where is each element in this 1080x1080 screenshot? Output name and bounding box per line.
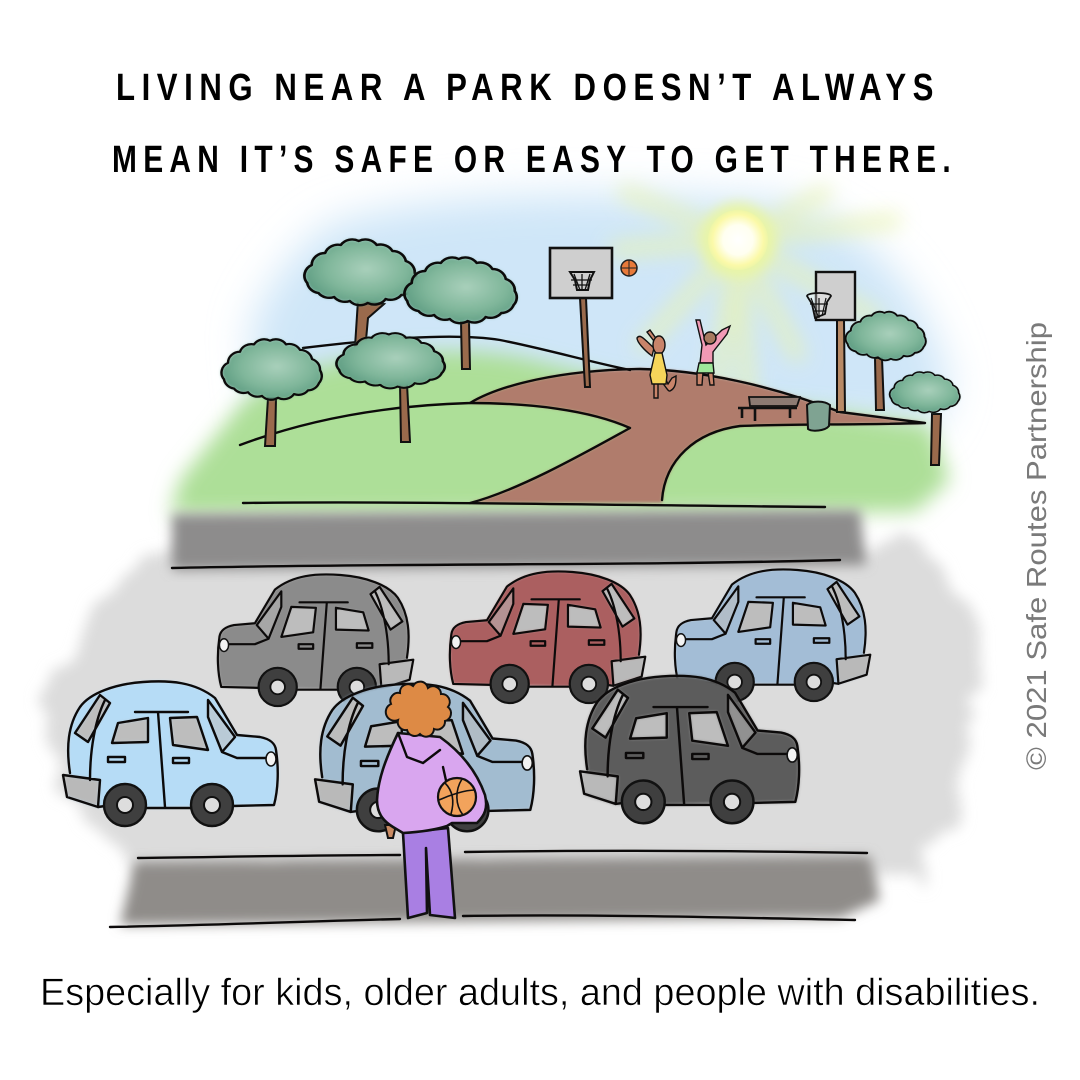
child with basketball — [377, 682, 486, 918]
tree 6 — [890, 372, 960, 465]
trees — [221, 239, 960, 465]
tree 1 — [304, 239, 417, 362]
dirt path — [470, 369, 925, 503]
car: red — [450, 571, 645, 703]
basketball — [438, 778, 476, 816]
basketball in air — [621, 260, 637, 276]
caption: Especially for kids, older adults, and people with disabilities. — [40, 972, 1040, 1014]
car: dark grey — [218, 574, 413, 706]
title — [112, 67, 957, 181]
player in pink — [696, 320, 730, 385]
tree 4 — [336, 333, 445, 442]
car: slate blue — [315, 684, 534, 831]
grass wash — [170, 351, 950, 515]
road edge lines — [110, 502, 867, 927]
tree 3 — [221, 339, 322, 446]
bench — [738, 397, 800, 421]
sky wash — [250, 194, 950, 430]
road: top band — [172, 510, 866, 570]
road: middle lanes wash — [35, 540, 980, 880]
copyright: © 2021 Safe Routes Partnership — [1021, 322, 1052, 770]
hoodie — [377, 733, 486, 833]
car: black — [580, 676, 799, 823]
hair — [386, 682, 451, 737]
player in yellow — [637, 330, 676, 398]
car: steel blue — [675, 569, 870, 701]
tree 2 — [404, 257, 517, 369]
tree 5 — [846, 312, 926, 410]
left hand — [385, 825, 396, 838]
hill and path lines — [240, 337, 925, 503]
right basketball hoop — [807, 272, 855, 412]
pants — [403, 828, 455, 918]
sun and rays — [610, 190, 900, 400]
left basketball hoop — [550, 248, 612, 387]
car: light blue — [63, 681, 278, 826]
trash can — [807, 402, 830, 431]
road: bottom band — [120, 856, 880, 925]
